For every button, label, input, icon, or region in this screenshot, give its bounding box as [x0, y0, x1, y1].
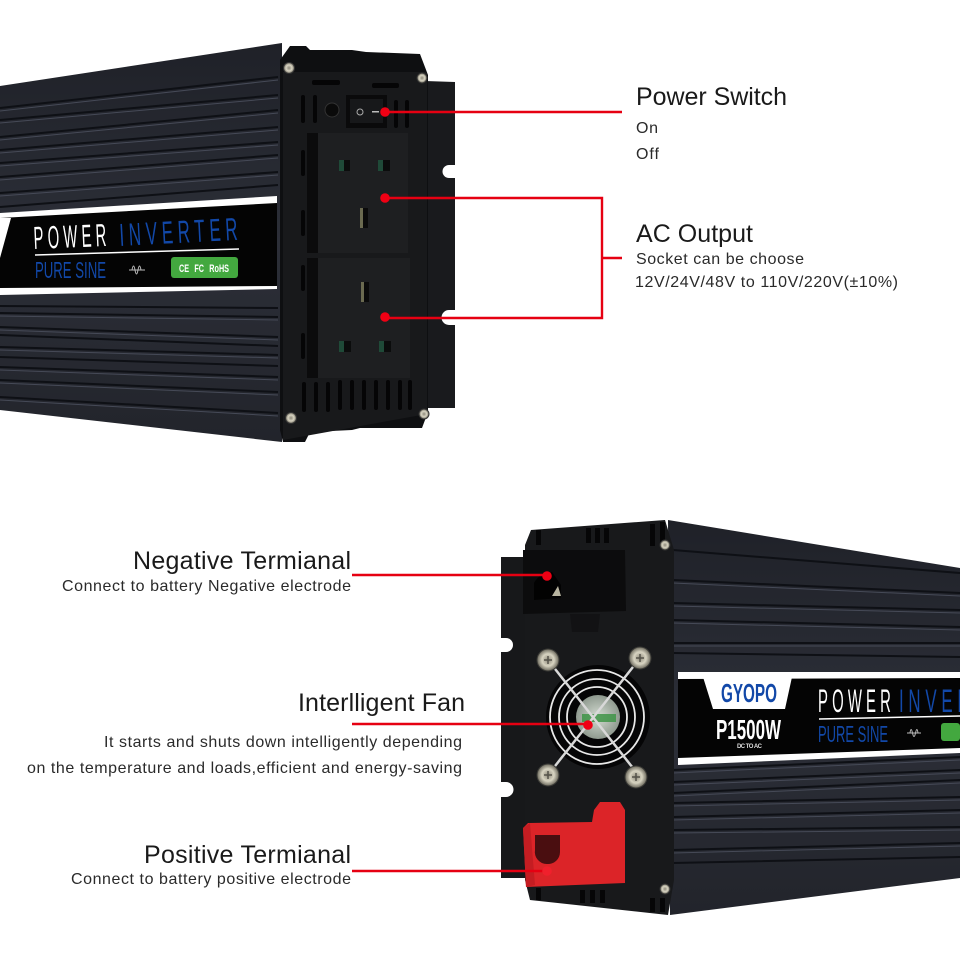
INVERTER text: INVERTER: [118, 211, 243, 253]
text block: intelligent fan: [27, 689, 465, 777]
label divider: [819, 716, 960, 719]
logo edge: [0, 218, 11, 258]
end face vent slots: [301, 80, 412, 412]
top inverter photo: socket end: [0, 43, 455, 442]
callout line: negative terminal: [352, 571, 552, 581]
text block: AC output: AC Output: [636, 220, 753, 248]
text block: intelligent fan: on the temperature and loads,efficient and energy-saving: [27, 760, 462, 777]
text block: negative terminal: [62, 547, 351, 595]
text block: negative terminal: Connect to battery Negative electrode: [62, 578, 351, 595]
UK socket lower: [307, 258, 410, 378]
certification badge: [941, 723, 960, 741]
PURE SINE text: PURE SINE: [818, 721, 888, 747]
rear mounting plate: [425, 81, 455, 408]
sine wave mark: [129, 266, 145, 274]
bottom inverter label: [678, 672, 960, 765]
text block: power switch: On: [636, 120, 658, 137]
cooling fan: [537, 647, 651, 788]
sine wave mark: [907, 730, 921, 736]
certification badge: [171, 257, 238, 278]
certification badge: CE FC RoHS: [179, 263, 229, 275]
PURE SINE text: PURE SINE: [35, 257, 106, 283]
end face corner screws: [284, 62, 429, 424]
DC to AC caption: DC TO AC: [737, 744, 763, 750]
text block: negative terminal: Negative Termianal: [133, 547, 351, 575]
end face panel: [283, 72, 427, 440]
black negative terminal cover: [523, 550, 626, 632]
indicator knob: [325, 103, 339, 117]
text block: power switch: Power Switch: [636, 83, 787, 111]
text block: intelligent fan: Interlligent Fan: [298, 689, 465, 717]
top face fins: [280, 46, 428, 442]
power rocker switch: [346, 95, 387, 128]
callout lines: AC output: [380, 193, 622, 322]
text block: positive terminal: [71, 841, 351, 888]
top and bottom fins and end face: [525, 520, 674, 915]
callout line: positive terminal: [352, 866, 552, 876]
callout lines: power switch: [380, 107, 622, 117]
text block: AC output: [635, 220, 898, 291]
model number: P1500W: [716, 714, 781, 745]
text block: power switch: Off: [636, 146, 660, 163]
callout line: fan: [352, 720, 593, 730]
top inverter label: POWER: [33, 217, 111, 256]
red positive terminal cover: [523, 802, 625, 887]
text block: AC output: 12V/24V/48V to 110V/220V(±10%): [635, 274, 898, 291]
bottom inverter photo: terminal end: [501, 520, 960, 915]
bottom inverter body side: [668, 520, 960, 915]
text block: positive terminal: Positive Termianal: [144, 841, 351, 869]
top inverter body side: [0, 43, 282, 442]
top inverter label: [0, 196, 277, 295]
text block: AC output: Socket can be choose: [636, 251, 804, 268]
end fin teeth: [536, 522, 665, 912]
text block: positive terminal: Connect to battery positive electrode: [71, 871, 351, 888]
UK socket upper: [307, 133, 408, 253]
GYOPO logo tag: GYOPO: [721, 678, 777, 708]
mounting plate: [501, 557, 527, 878]
case screws: [660, 540, 670, 894]
GYOPO logo tag: [703, 677, 792, 709]
text block: intelligent fan: It starts and shuts down intelligently depending: [104, 734, 462, 751]
label divider: [35, 249, 239, 255]
text block: power switch: [636, 83, 787, 163]
